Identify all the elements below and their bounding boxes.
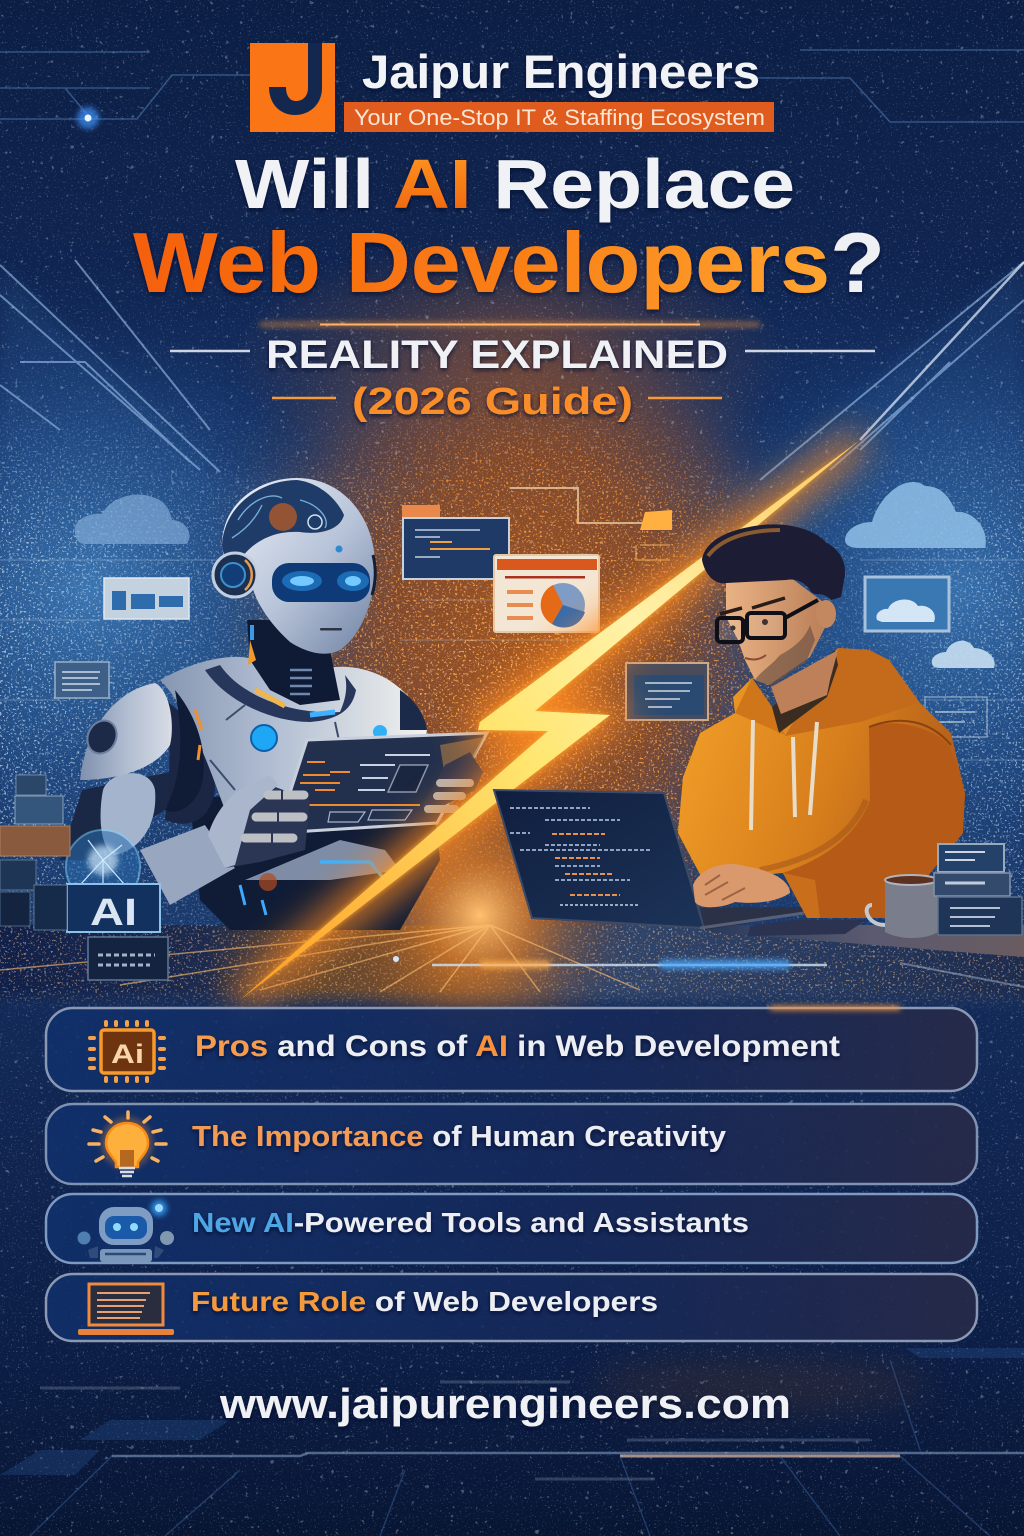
title glow line <box>260 322 760 327</box>
cloud left <box>75 494 190 544</box>
window: code panel right <box>626 663 708 720</box>
icon: AI chip: Ai <box>111 1039 144 1069</box>
forearm <box>140 825 235 905</box>
window: left UI <box>104 578 189 619</box>
window with cloud <box>865 577 949 631</box>
panel text: The Importance of Human Creativity <box>192 1121 726 1153</box>
desk floor <box>0 765 1024 1065</box>
title line 1: Will AI Replace <box>235 145 795 223</box>
robot arm rear <box>60 770 180 860</box>
AI box: AI <box>90 892 137 934</box>
title line 2: Web Developers ? <box>133 216 885 311</box>
tablet on desk <box>748 920 866 936</box>
glasses <box>717 600 818 642</box>
title <box>133 145 885 311</box>
stacked boxes <box>934 844 1022 935</box>
robot neck <box>247 620 340 705</box>
ear ring <box>213 553 257 597</box>
subtitle: (2026 Guide) <box>352 381 633 423</box>
lightning bolt <box>240 262 1024 1000</box>
robot hand left <box>208 775 310 868</box>
robot torso <box>160 657 427 830</box>
icon: robot assistant <box>78 1200 174 1262</box>
brand name: Jaipur Engineers <box>362 45 760 98</box>
window: code panel <box>402 505 509 579</box>
window: left code <box>55 662 109 698</box>
clouds and floating windows <box>55 482 995 737</box>
core light <box>251 725 277 751</box>
connector line <box>510 488 672 560</box>
panel: human creativity <box>46 1104 977 1184</box>
subtitle <box>170 333 875 423</box>
server boxes <box>0 775 168 980</box>
hoodie <box>678 648 965 918</box>
panel text: Future Role of Web Developers <box>191 1286 658 1317</box>
icon: light bulb <box>89 1112 166 1176</box>
hands <box>693 864 820 918</box>
tablet <box>277 733 487 833</box>
logo: Jaipur Engineers <box>250 43 774 132</box>
drawstrings <box>751 720 817 830</box>
panel: pros and cons <box>46 1006 977 1091</box>
icon: J mark <box>250 43 335 132</box>
icon: AI chip <box>90 1022 164 1081</box>
hair highlight <box>708 530 780 556</box>
website url: www.jaipurengineers.com <box>219 1380 791 1427</box>
neck and shirt <box>771 650 838 733</box>
icon: laptop <box>78 1284 174 1335</box>
window: right chart <box>925 697 987 737</box>
cloud right <box>845 482 986 548</box>
subtitle: REALITY EXPLAINED <box>266 333 728 377</box>
mug <box>867 875 938 938</box>
robot lower body <box>190 770 440 930</box>
window: pie chart <box>494 555 599 632</box>
robot <box>0 478 487 980</box>
developer desk <box>711 925 1024 957</box>
small cloud <box>932 641 995 668</box>
hair <box>702 524 845 600</box>
robot hand right <box>423 752 483 815</box>
AI globe <box>66 830 140 904</box>
shoulder plate <box>80 683 172 780</box>
panel text: Pros and Cons of AI in Web Development <box>195 1030 840 1063</box>
AI box <box>67 884 160 934</box>
visor <box>272 563 370 602</box>
tagline bar: Your One-Stop IT & Staffing Ecosystem <box>354 105 765 130</box>
face <box>720 577 836 686</box>
laptop <box>494 790 804 930</box>
developer <box>494 524 1022 938</box>
panel text: New AI -Powered Tools and Assistants <box>192 1207 749 1238</box>
panel: AI tools <box>46 1194 977 1263</box>
panel: future role <box>46 1274 977 1341</box>
robot head <box>213 478 375 654</box>
